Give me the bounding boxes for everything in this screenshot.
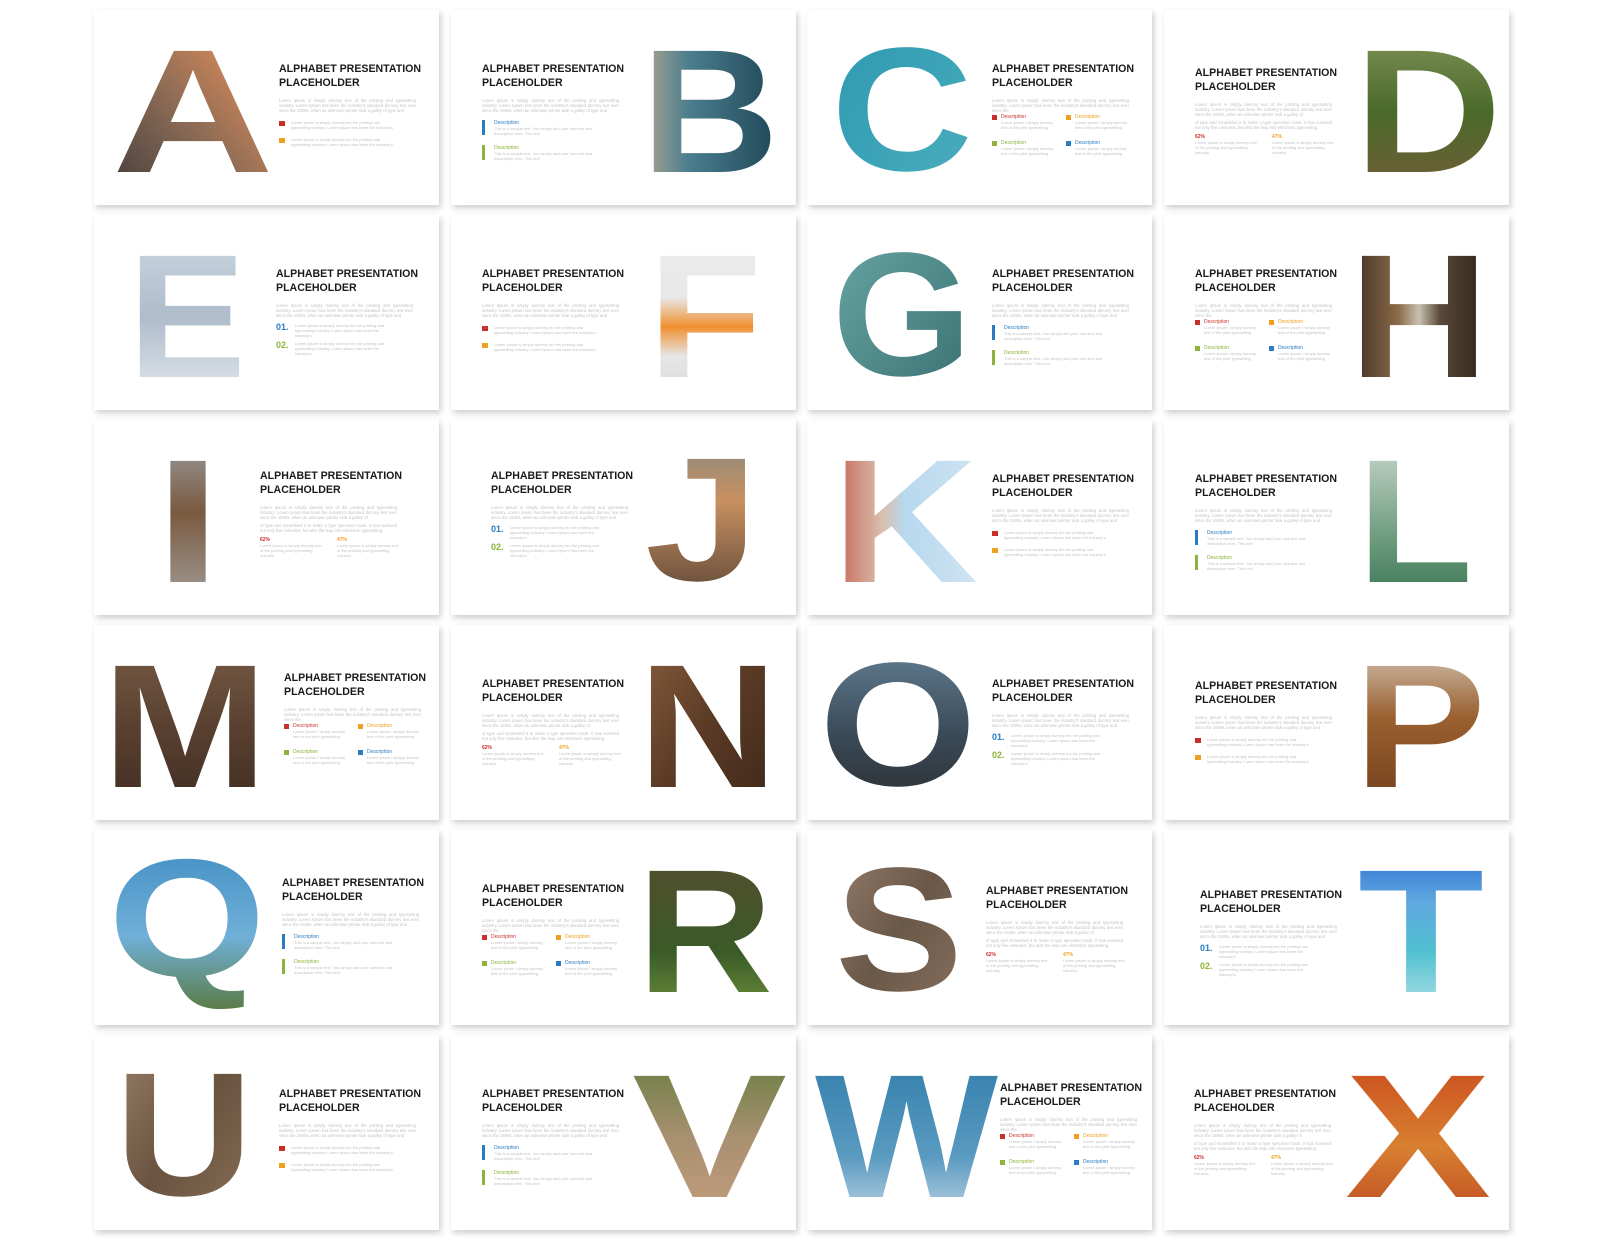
text O: Lorem Ipsum is simply dummy text of the printing and typesetting industry. Lorem Ipsum has been the industry's standard dummy text ever since the 1500s, when an unknown printer took a galley of type and bbox=[992, 713, 1129, 728]
letter F: F bbox=[648, 219, 762, 410]
text X bbox=[1194, 1087, 1334, 1197]
text H: Description bbox=[1204, 319, 1229, 325]
text K: ALPHABET PRESENTATION bbox=[992, 473, 1134, 485]
text H: Lorem Ipsum i simply dummy text of the print typesetting bbox=[1278, 351, 1330, 361]
text X: 47% bbox=[1271, 1155, 1281, 1161]
text B: This is a sample text. You simply add your own text and description here. This text bbox=[494, 126, 592, 136]
text N: PLACEHOLDER bbox=[482, 692, 563, 704]
text N: 62% bbox=[482, 745, 492, 751]
text J: Lorem Ipsum is simply dummy text of the printing and typesetting industry. Lorem Ipsum has been the industry's standard dummy text ever since the 1500s, when an unknown printer took a galley of type and bbox=[491, 505, 628, 520]
text E: 01. bbox=[276, 322, 289, 332]
text E: Lorem Ipsum is simply dummy tex the printing and typesetting industry. Lorem Ipsum has been the industry's bbox=[295, 323, 384, 338]
text G: Description bbox=[1004, 325, 1029, 331]
text U: ALPHABET PRESENTATION bbox=[279, 1088, 421, 1100]
text B: Description bbox=[494, 145, 519, 151]
letter X: X bbox=[1345, 1039, 1491, 1230]
text V: ALPHABET PRESENTATION bbox=[482, 1088, 624, 1100]
text R: Description bbox=[565, 934, 590, 940]
text C: Description bbox=[1075, 114, 1100, 120]
text W bbox=[1000, 1081, 1140, 1191]
text B: Lorem Ipsum is simply dummy text of the printing and typesetting industry. Lorem Ipsum has been the industry's standard dummy text ever since the 1500s, when an unknown printer took a galley of type and bbox=[482, 98, 619, 113]
text A: Lorem Ipsum is simply dummy text of the printing and typesetting industry. Lorem Ipsum has been the industry's standard dummy text ever since the 1500s, when an unknown printer took a galley of type and bbox=[279, 98, 416, 113]
text S: PLACEHOLDER bbox=[986, 899, 1067, 911]
text N: Lorem Ipsum is simply dummy text of the printing and typesetting industry. bbox=[482, 751, 544, 766]
text P: PLACEHOLDER bbox=[1195, 694, 1276, 706]
text B: PLACEHOLDER bbox=[482, 77, 563, 89]
card I bbox=[94, 420, 439, 615]
card V bbox=[451, 1035, 796, 1230]
text D: 62% bbox=[1195, 134, 1205, 140]
text M bbox=[284, 672, 426, 765]
card U bbox=[94, 1035, 439, 1230]
text V: PLACEHOLDER bbox=[482, 1102, 563, 1114]
text T: Lorem Ipsum is simply dummy tex the printing and typesetting industry. Lorem Ipsum has been the industry's bbox=[1219, 962, 1308, 977]
text Q bbox=[282, 877, 424, 975]
text P: Lorem Ipsum is simply dummy tex the printing and typesetting industry. Lorem Ipsum has been the industry's bbox=[1207, 754, 1309, 764]
letter J: J bbox=[645, 422, 759, 615]
text L: This is a sample text. You simply add your own text and description here. This text bbox=[1207, 561, 1305, 571]
text S: Lorem Ipsum is simply dummy text of the printing and typesetting industry. Lorem Ipsum has been the industry's standard dummy text ever since the 1500s, when an unknown printer took a galley of bbox=[986, 920, 1123, 935]
text V: Lorem Ipsum is simply dummy text of the printing and typesetting industry. Lorem Ipsum has been the industry's standard dummy text ever since the 1500s, when an unknown printer took a galley of type and bbox=[482, 1123, 619, 1138]
letter L: L bbox=[1357, 424, 1473, 615]
text O bbox=[992, 678, 1134, 766]
card M bbox=[94, 625, 439, 820]
text O: 01. bbox=[992, 732, 1005, 742]
card H bbox=[1164, 215, 1509, 410]
text H: Lorem Ipsum i simply dummy text of the print typesetting bbox=[1278, 325, 1330, 335]
text Q: This is a sample text. You simply add your own text and description here. This text bbox=[294, 940, 392, 950]
text C: Lorem Ipsum i simply dummy text of the print typesetting bbox=[1001, 120, 1053, 130]
letter D: D bbox=[1354, 14, 1502, 205]
card Q bbox=[94, 830, 439, 1025]
text R: PLACEHOLDER bbox=[482, 897, 563, 909]
text C: Lorem Ipsum i simply dummy text of the print typesetting bbox=[1001, 146, 1053, 156]
text W: Lorem Ipsum is simply dummy text of the printing and typesetting industry. Lorem Ipsum has been the industry's standard dummy text ever since the bbox=[1000, 1117, 1137, 1132]
text M: Lorem Ipsum i simply dummy text of the print typesetting bbox=[367, 755, 419, 765]
text M: Lorem Ipsum i simply dummy text of the print typesetting bbox=[293, 729, 345, 739]
text M: Description bbox=[367, 749, 392, 755]
text L: This is a sample text. You simply add your own text and description here. This text bbox=[1207, 536, 1305, 546]
text O: PLACEHOLDER bbox=[992, 692, 1073, 704]
text X: ALPHABET PRESENTATION bbox=[1194, 1088, 1336, 1100]
text G: Lorem Ipsum is simply dummy text of the printing and typesetting industry. Lorem Ipsum has been the industry's standard dummy text ever since the 1500s, when an unknown printer took a galley of type and bbox=[992, 303, 1129, 318]
text M: Lorem Ipsum i simply dummy text of the print typesetting bbox=[293, 755, 345, 765]
text F: Lorem Ipsum is simply dummy tex the printing and typesetting industry. Lorem Ipsum has been the industry's bbox=[494, 325, 596, 335]
card B bbox=[451, 10, 796, 205]
text C: Description bbox=[1075, 140, 1100, 146]
text A: PLACEHOLDER bbox=[279, 77, 360, 89]
text D: PLACEHOLDER bbox=[1195, 81, 1276, 93]
text J: Lorem Ipsum is simply dummy tex the printing and typesetting industry. Lorem Ipsum has been the industry's bbox=[510, 543, 599, 558]
text H: ALPHABET PRESENTATION bbox=[1195, 268, 1337, 280]
text P: Lorem Ipsum is simply dummy text of the printing and typesetting industry. Lorem Ipsum has been the industry's standard dummy text ever since the 1500s, when an unknown printer took a galley of type and bbox=[1195, 715, 1332, 730]
text W: Lorem Ipsum i simply dummy text of the print typesetting bbox=[1009, 1165, 1061, 1175]
text W: Description bbox=[1009, 1159, 1034, 1165]
text G: ALPHABET PRESENTATION bbox=[992, 268, 1134, 280]
text K: Lorem Ipsum is simply dummy tex the printing and typesetting industry. Lorem Ipsum has been the industry's bbox=[1004, 530, 1106, 540]
text S: of type and scrambled it to make a type specimen book. It has survived not only five centuries, but also the leap into electronic typesetting. bbox=[986, 938, 1123, 948]
text D: 47% bbox=[1272, 134, 1282, 140]
letter K: K bbox=[832, 424, 978, 615]
text R: Description bbox=[491, 934, 516, 940]
text A: Lorem Ipsum is simply dummy tex the printing and typesetting industry. Lorem Ipsum has been the industry's bbox=[291, 137, 393, 147]
text A: Lorem Ipsum is simply dummy tex the printing and typesetting industry. Lorem Ipsum has been the industry's bbox=[291, 120, 393, 130]
text T: 02. bbox=[1200, 961, 1213, 971]
text W: Lorem Ipsum i simply dummy text of the print typesetting bbox=[1083, 1165, 1135, 1175]
text P: ALPHABET PRESENTATION bbox=[1195, 680, 1337, 692]
card S bbox=[807, 830, 1152, 1025]
text I bbox=[260, 470, 402, 558]
text X: 62% bbox=[1194, 1155, 1204, 1161]
text R: Lorem Ipsum i simply dummy text of the print typesetting bbox=[491, 940, 543, 950]
letter I: I bbox=[154, 424, 222, 615]
text J: 02. bbox=[491, 542, 504, 552]
text L: PLACEHOLDER bbox=[1195, 487, 1276, 499]
text I: of type and scrambled it to make a type specimen book. It has survived not only five centuries, but also the leap into electronic typesetting. bbox=[260, 523, 397, 533]
text A: ALPHABET PRESENTATION bbox=[279, 63, 421, 75]
text A bbox=[279, 63, 421, 147]
text L: Description bbox=[1207, 555, 1232, 561]
text H: Description bbox=[1278, 319, 1303, 325]
text E: 02. bbox=[276, 340, 289, 350]
letter H: H bbox=[1349, 219, 1489, 410]
card T bbox=[1164, 830, 1509, 1025]
text W: Description bbox=[1009, 1133, 1034, 1139]
text B: Description bbox=[494, 120, 519, 126]
text V: This is a sample text. You simply add your own text and description here. This text bbox=[494, 1176, 592, 1186]
text X: Lorem Ipsum is simply dummy text of the printing and typesetting industry. bbox=[1194, 1161, 1256, 1176]
text E bbox=[276, 268, 418, 356]
text N: Lorem Ipsum is simply dummy text of the printing and typesetting industry. Lorem Ipsum has been the industry's standard dummy text ever since the 1500s, when an unknown printer took a galley of bbox=[482, 713, 619, 728]
text O: ALPHABET PRESENTATION bbox=[992, 678, 1134, 690]
text K: PLACEHOLDER bbox=[992, 487, 1073, 499]
text F: Lorem Ipsum is simply dummy tex the printing and typesetting industry. Lorem Ipsum has been the industry's bbox=[494, 342, 596, 352]
text S: 47% bbox=[1063, 952, 1073, 958]
text M: ALPHABET PRESENTATION bbox=[284, 672, 426, 684]
card F bbox=[451, 215, 796, 410]
text Q: ALPHABET PRESENTATION bbox=[282, 877, 424, 889]
card W bbox=[807, 1035, 1152, 1230]
letter C: C bbox=[831, 12, 973, 205]
text F: ALPHABET PRESENTATION bbox=[482, 268, 624, 280]
text K: Lorem Ipsum is simply dummy tex the printing and typesetting industry. Lorem Ipsum has been the industry's bbox=[1004, 547, 1106, 557]
text H bbox=[1195, 268, 1337, 361]
card E bbox=[94, 215, 439, 410]
text L: Description bbox=[1207, 530, 1232, 536]
text I: ALPHABET PRESENTATION bbox=[260, 470, 402, 482]
text N: 47% bbox=[559, 745, 569, 751]
text L bbox=[1195, 473, 1337, 571]
text U: Lorem Ipsum is simply dummy tex the printing and typesetting industry. Lorem Ipsum has been the industry's bbox=[291, 1145, 393, 1155]
text G: This is a sample text. You simply add your own text and description here. This text bbox=[1004, 356, 1102, 366]
letter U: U bbox=[115, 1037, 253, 1230]
text D: Lorem Ipsum is simply dummy text of the printing and typesetting industry. Lorem Ipsum has been the industry's standard dummy text ever since the 1500s, when an unknown printer took a galley of bbox=[1195, 102, 1332, 117]
text U: Lorem Ipsum is simply dummy text of the printing and typesetting industry. Lorem Ipsum has been the industry's standard dummy text ever since the 1500s, when an unknown printer took a galley of type and bbox=[279, 1123, 416, 1138]
text E: Lorem Ipsum is simply dummy text of the printing and typesetting industry. Lorem Ipsum has been the industry's standard dummy text ever since the 1500s, when an unknown printer took a galley of type and bbox=[276, 303, 413, 318]
text J: 01. bbox=[491, 524, 504, 534]
text E: Lorem Ipsum is simply dummy tex the printing and typesetting industry. Lorem Ipsum has been the industry's bbox=[295, 341, 384, 356]
text R: Lorem Ipsum i simply dummy text of the print typesetting bbox=[565, 940, 617, 950]
text W: ALPHABET PRESENTATION bbox=[1000, 1082, 1142, 1094]
text R: Description bbox=[565, 960, 590, 966]
text U bbox=[279, 1087, 419, 1197]
letter V: V bbox=[632, 1039, 787, 1230]
letter W: W bbox=[815, 1039, 998, 1230]
text L: ALPHABET PRESENTATION bbox=[1195, 473, 1337, 485]
letter B: B bbox=[641, 14, 779, 205]
text T: Lorem Ipsum is simply dummy text of the printing and typesetting industry. Lorem Ipsum has been the industry's standard dummy text ever since the 1500s, when an unknown printer took a galley of type and bbox=[1200, 924, 1337, 939]
text T: Lorem Ipsum is simply dummy tex the printing and typesetting industry. Lorem Ipsum has been the industry's bbox=[1219, 944, 1308, 959]
text O: Lorem Ipsum is simply dummy tex the printing and typesetting industry. Lorem Ipsum has been the industry's bbox=[1011, 733, 1100, 748]
text Q: Description bbox=[294, 959, 319, 965]
card J bbox=[451, 420, 796, 615]
text K bbox=[992, 473, 1134, 557]
text R: ALPHABET PRESENTATION bbox=[482, 883, 624, 895]
text S: Lorem Ipsum is simply dummy text of the printing and typesetting industry. bbox=[986, 958, 1048, 973]
text S: Lorem Ipsum is simply dummy text of the printing and typesetting industry. bbox=[1063, 958, 1125, 973]
text D: of type and scrambled it to make a type specimen book. It has survived not only five centuries, but also the leap into electronic typesetting. bbox=[1195, 120, 1332, 130]
text V: Description bbox=[494, 1145, 519, 1151]
text W: PLACEHOLDER bbox=[1000, 1096, 1081, 1108]
card R bbox=[451, 830, 796, 1025]
text H: Lorem Ipsum i simply dummy text of the print typesetting bbox=[1204, 325, 1256, 335]
text T: 01. bbox=[1200, 943, 1213, 953]
text V bbox=[482, 1087, 622, 1197]
text I: Lorem Ipsum is simply dummy text of the printing and typesetting industry. Lorem Ipsum has been the industry's standard dummy text ever since the 1500s, when an unknown printer took a galley of bbox=[260, 505, 397, 520]
text U: PLACEHOLDER bbox=[279, 1102, 360, 1114]
card A bbox=[94, 10, 439, 205]
text B: ALPHABET PRESENTATION bbox=[482, 63, 624, 75]
text V: Description bbox=[494, 1170, 519, 1176]
text I: 62% bbox=[260, 537, 270, 543]
text F: PLACEHOLDER bbox=[482, 282, 563, 294]
text R: Description bbox=[491, 960, 516, 966]
text G: This is a sample text. You simply add your own text and description here. This text bbox=[1004, 331, 1102, 341]
text Q: This is a sample text. You simply add your own text and description here. This text bbox=[294, 965, 392, 975]
card P bbox=[1164, 625, 1509, 820]
text C: PLACEHOLDER bbox=[992, 77, 1073, 89]
text I: Lorem Ipsum is simply dummy text of the printing and typesetting industry. bbox=[260, 543, 322, 558]
text E: ALPHABET PRESENTATION bbox=[276, 268, 418, 280]
text M: Description bbox=[367, 723, 392, 729]
card L bbox=[1164, 420, 1509, 615]
text H: Lorem Ipsum is simply dummy text of the printing and typesetting industry. Lorem Ipsum has been the industry's standard dummy text ever since the bbox=[1195, 303, 1332, 318]
text O: Lorem Ipsum is simply dummy tex the printing and typesetting industry. Lorem Ipsum has been the industry's bbox=[1011, 751, 1100, 766]
text P bbox=[1195, 680, 1337, 764]
text B: This is a sample text. You simply add your own text and description here. This text bbox=[494, 151, 592, 161]
text R: Lorem Ipsum is simply dummy text of the printing and typesetting industry. Lorem Ipsum has been the industry's standard dummy text ever since the bbox=[482, 918, 619, 933]
text K: Lorem Ipsum is simply dummy text of the printing and typesetting industry. Lorem Ipsum has been the industry's standard dummy text ever since the 1500s, when an unknown printer took a galley of type and bbox=[992, 508, 1129, 523]
text T: ALPHABET PRESENTATION bbox=[1200, 889, 1342, 901]
text C: Lorem Ipsum i simply dummy text of the print typesetting bbox=[1075, 146, 1127, 156]
text C: ALPHABET PRESENTATION bbox=[992, 63, 1134, 75]
letter G: G bbox=[832, 217, 972, 410]
text D: Lorem Ipsum is simply dummy text of the printing and typesetting industry. bbox=[1195, 140, 1257, 155]
text X: PLACEHOLDER bbox=[1194, 1102, 1275, 1114]
text N: of type and scrambled it to make a type specimen book. It has survived not only five centuries, but also the leap into electronic typesetting. bbox=[482, 731, 619, 741]
text B bbox=[482, 63, 624, 161]
text S: ALPHABET PRESENTATION bbox=[986, 885, 1128, 897]
text P: Lorem Ipsum is simply dummy tex the printing and typesetting industry. Lorem Ipsum has been the industry's bbox=[1207, 737, 1309, 747]
text C: Description bbox=[1001, 140, 1026, 146]
text M: Description bbox=[293, 723, 318, 729]
text R: Lorem Ipsum i simply dummy text of the print typesetting bbox=[565, 966, 617, 976]
text C: Lorem Ipsum i simply dummy text of the print typesetting bbox=[1075, 120, 1127, 130]
letter R: R bbox=[637, 834, 773, 1025]
text I: 47% bbox=[337, 537, 347, 543]
text D: ALPHABET PRESENTATION bbox=[1195, 67, 1337, 79]
text H: Lorem Ipsum i simply dummy text of the print typesetting bbox=[1204, 351, 1256, 361]
text V: This is a sample text. You simply add your own text and description here. This text bbox=[494, 1151, 592, 1161]
letter S: S bbox=[835, 832, 963, 1025]
text M: Description bbox=[293, 749, 318, 755]
letter N: N bbox=[638, 629, 778, 820]
text G: PLACEHOLDER bbox=[992, 282, 1073, 294]
text R bbox=[482, 883, 624, 976]
text J: Lorem Ipsum is simply dummy tex the printing and typesetting industry. Lorem Ipsum has been the industry's bbox=[510, 525, 599, 540]
text S bbox=[986, 885, 1128, 973]
text J: PLACEHOLDER bbox=[491, 484, 572, 496]
text J: ALPHABET PRESENTATION bbox=[491, 470, 633, 482]
card N bbox=[451, 625, 796, 820]
text O: 02. bbox=[992, 750, 1005, 760]
card D bbox=[1164, 10, 1509, 205]
text J bbox=[491, 470, 633, 558]
text C: Lorem Ipsum is simply dummy text of the printing and typesetting industry. Lorem Ipsum has been the industry's standard dummy text ever since the bbox=[992, 98, 1129, 113]
text G bbox=[992, 268, 1134, 366]
text X: Lorem Ipsum is simply dummy text of the printing and typesetting industry. Lorem Ipsum has been the industry's standard dummy text ever since the 1500s, when an unknown printer took a galley of bbox=[1194, 1123, 1331, 1138]
letter A: A bbox=[112, 14, 274, 205]
card K bbox=[807, 420, 1152, 615]
text N: Lorem Ipsum is simply dummy text of the printing and typesetting industry. bbox=[559, 751, 621, 766]
text S: 62% bbox=[986, 952, 996, 958]
letter M: M bbox=[102, 629, 268, 820]
text C: Description bbox=[1001, 114, 1026, 120]
text T: PLACEHOLDER bbox=[1200, 903, 1281, 915]
text W: Description bbox=[1083, 1133, 1108, 1139]
text C bbox=[992, 63, 1134, 156]
text M: Lorem Ipsum is simply dummy text of the printing and typesetting industry. Lorem Ipsum has been the industry's standard dummy text ever since the bbox=[284, 707, 421, 722]
text E: PLACEHOLDER bbox=[276, 282, 357, 294]
card C bbox=[807, 10, 1152, 205]
text F bbox=[482, 268, 624, 352]
text F: Lorem Ipsum is simply dummy text of the printing and typesetting industry. Lorem Ipsum has been the industry's standard dummy text ever since the 1500s, when an unknown printer took a galley of type and bbox=[482, 303, 619, 318]
text R: Lorem Ipsum i simply dummy text of the print typesetting bbox=[491, 966, 543, 976]
text I: PLACEHOLDER bbox=[260, 484, 341, 496]
text H: Description bbox=[1204, 345, 1229, 351]
text H: Description bbox=[1278, 345, 1303, 351]
text G: Description bbox=[1004, 350, 1029, 356]
text U: Lorem Ipsum is simply dummy tex the printing and typesetting industry. Lorem Ipsum has been the industry's bbox=[291, 1162, 393, 1172]
card O bbox=[807, 625, 1152, 820]
text I: Lorem Ipsum is simply dummy text of the printing and typesetting industry. bbox=[337, 543, 399, 558]
text Q: Description bbox=[294, 934, 319, 940]
card X bbox=[1164, 1035, 1509, 1230]
text M: PLACEHOLDER bbox=[284, 686, 365, 698]
card G bbox=[807, 215, 1152, 410]
text W: Description bbox=[1083, 1159, 1108, 1165]
text D: Lorem Ipsum is simply dummy text of the printing and typesetting industry. bbox=[1272, 140, 1334, 155]
text X: Lorem Ipsum is simply dummy text of the printing and typesetting industry. bbox=[1271, 1161, 1333, 1176]
text N: ALPHABET PRESENTATION bbox=[482, 678, 624, 690]
text D bbox=[1195, 67, 1337, 155]
text H: PLACEHOLDER bbox=[1195, 282, 1276, 294]
text Q: PLACEHOLDER bbox=[282, 891, 363, 903]
text Q: Lorem Ipsum is simply dummy text of the printing and typesetting industry. Lorem Ipsum has been the industry's standard dummy text ever since the 1500s, when an unknown printer took a galley of type and bbox=[282, 912, 419, 927]
text L: Lorem Ipsum is simply dummy text of the printing and typesetting industry. Lorem Ipsum has been the industry's standard dummy text ever since the 1500s, when an unknown printer took a galley of type and bbox=[1195, 508, 1332, 523]
letter O: O bbox=[819, 627, 977, 820]
letter T: T bbox=[1358, 834, 1484, 1025]
text W: Lorem Ipsum i simply dummy text of the print typesetting bbox=[1009, 1139, 1061, 1149]
text N bbox=[482, 678, 624, 766]
letter E: E bbox=[128, 219, 246, 410]
letter P: P bbox=[1354, 629, 1486, 820]
text M: Lorem Ipsum i simply dummy text of the print typesetting bbox=[367, 729, 419, 739]
text W: Lorem Ipsum i simply dummy text of the print typesetting bbox=[1083, 1139, 1135, 1149]
text X: of type and scrambled it to make a type specimen book. It has survived not only five centuries, but also the leap into electronic typesetting. bbox=[1194, 1141, 1331, 1151]
text T bbox=[1200, 889, 1342, 977]
